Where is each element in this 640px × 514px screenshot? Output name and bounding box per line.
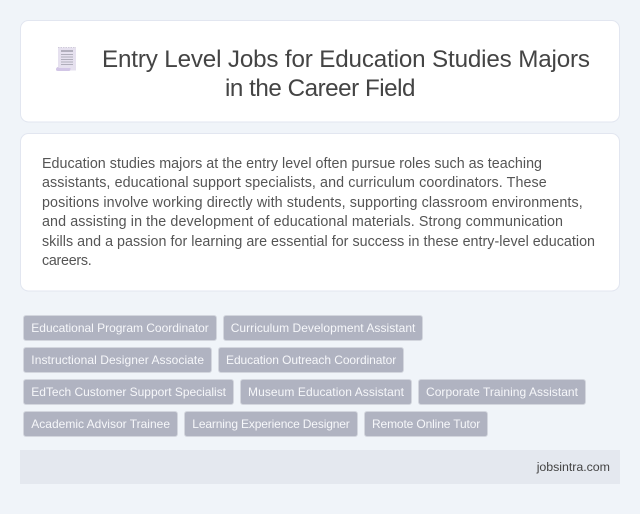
panel: description [20,134,620,291]
tag: Learning Experience Designer [184,412,358,436]
tag: Academic Advisor Trainee: Academic Advisor Trainee [31,417,170,431]
tags: job titles [24,316,586,436]
tag: Museum Education Assistant: Museum Education Assistant [248,385,405,399]
tag: EdTech Customer Support Specialist [24,380,234,404]
tag: Academic Advisor Trainee [24,412,178,436]
tag: Museum Education Assistant [240,380,412,404]
text block: description: Education studies majors at the entry level often pursue roles such as teaching [42,156,542,172]
tag: Remote Online Tutor: Remote Online Tutor [372,417,480,431]
tag: Education Outreach Coordinator: Education Outreach Coordinator [226,353,396,367]
tag: Instructional Designer Associate [24,348,212,372]
title: Entry Level Jobs for Education Studies Majors [102,46,590,73]
text block: description: assistants, educational support specialists, and curriculum coordinators. These [42,175,547,191]
text block: description: positions involve working directly with students, supporting classroom environments, [42,195,583,211]
footer [20,450,620,484]
tag: Learning Experience Designer: Learning Experience Designer [192,417,350,431]
tag: Educational Program Coordinator [24,316,216,340]
tag: Curriculum Development Assistant: Curriculum Development Assistant [231,321,416,335]
tag: Corporate Training Assistant [418,380,586,404]
tag: Educational Program Coordinator: Educational Program Coordinator [31,321,209,335]
title [102,46,590,102]
tag: Corporate Training Assistant: Corporate Training Assistant [426,385,579,399]
text block: description: skills and a passion for learning are essential for success in these entry-level education [42,234,595,250]
footer source text: jobsintra.com [536,460,610,474]
text block: description: and assisting in the development of educational materials. Strong communication [42,214,563,230]
panel: header [20,20,620,122]
tag: Education Outreach Coordinator [218,348,404,372]
tag: Remote Online Tutor [364,412,488,436]
text block: description: careers. [42,253,92,269]
icon: document scroll [56,48,76,71]
title: in the Career Field [225,75,416,102]
tag: EdTech Customer Support Specialist: EdTech Customer Support Specialist [31,385,227,399]
tag: Instructional Designer Associate: Instructional Designer Associate [31,353,204,367]
text block: description [42,156,595,269]
tag: Curriculum Development Assistant [224,316,422,340]
